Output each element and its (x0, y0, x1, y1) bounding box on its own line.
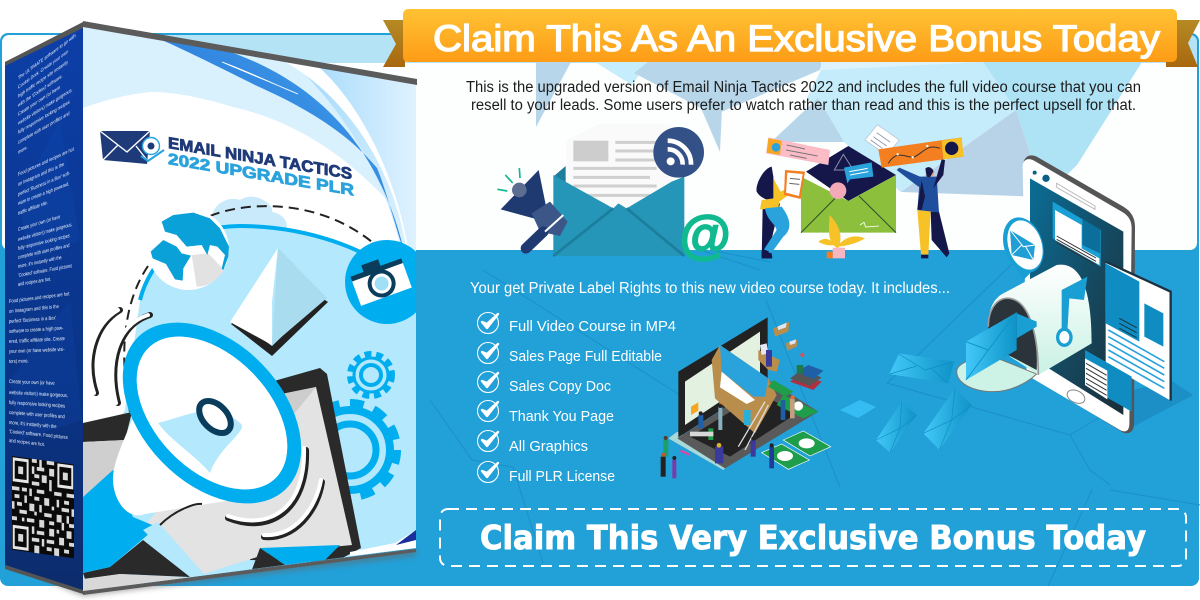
item: sales page (478, 342, 662, 365)
mail badge (996, 212, 1050, 280)
side panel text: ered, traffic affiliate site. Create (9, 336, 65, 344)
money bills (762, 380, 831, 469)
logo title: 2022 UPGRADE PLR (168, 150, 354, 200)
side panel text: Create your own (or have (9, 379, 55, 386)
side panel text: Create your own (or have (18, 213, 61, 232)
pale polygon backdrop (160, 35, 1197, 197)
side panel text: more. (18, 144, 28, 156)
side panel text: website visitors) make gorgeous, (18, 87, 72, 127)
rss badge (653, 127, 704, 178)
intro paragraph: resell to your leads. Some users prefer to watch rather than read and this is the perfect upsell for that. (471, 97, 1136, 114)
side panel text: software to create a high pow- (9, 325, 64, 334)
side panel text: high traffic recipe site instantly (18, 59, 68, 100)
side panel text: Food pictures and recipes are hot (18, 146, 74, 177)
ground shadow (1133, 380, 1193, 427)
parachute boxes (773, 322, 797, 351)
side panel text: on Instagram and this is the (9, 303, 59, 314)
side panel text: complete with user profiles and (18, 110, 70, 146)
orange chart (878, 137, 963, 168)
books (790, 353, 823, 390)
illustration light blue field (83, 226, 416, 600)
woman figure (756, 167, 805, 258)
subheading: Your get Private Label Rights to this new video course today. It includes... (470, 280, 950, 297)
item: thank you page: Thank You Page (509, 408, 614, 425)
side panel text: and recipes are hot. (18, 276, 51, 287)
man figure (897, 159, 949, 258)
box side panel (5, 22, 83, 594)
megaphone (83, 322, 302, 577)
teal envelope (553, 166, 684, 256)
call to action: Claim This Very Exclusive Bonus Today (480, 518, 1146, 557)
side panel text: tors) more. (9, 358, 29, 364)
letter (567, 123, 672, 207)
QR code (12, 456, 74, 558)
pale right bands (294, 64, 416, 252)
side panel text: website visitors) make gorgeous, (18, 221, 72, 242)
item: sales page: Sales Page Full Editable (509, 348, 662, 365)
plant (818, 215, 865, 258)
item: sales copy: Sales Copy Doc (509, 378, 611, 395)
blue chat bubble (844, 162, 873, 183)
screen card (1053, 202, 1101, 267)
side panel text (9, 32, 76, 447)
laptop (83, 368, 361, 600)
side panel text: with the 'Cooked' software. (18, 73, 62, 109)
green envelope (801, 146, 896, 233)
product box (5, 21, 429, 600)
cloud (212, 196, 287, 228)
side panel text: website visitors) make gorgeous, (9, 390, 68, 398)
call to action (440, 509, 1186, 566)
side panel text: ware to create a high powered, (18, 181, 69, 206)
side panel text: fully responsive looking recipes (18, 99, 70, 136)
side panel text: complete with user profiles and (18, 242, 70, 260)
flying envelopes (840, 353, 972, 453)
document panel (1106, 262, 1171, 401)
item: license (478, 462, 615, 485)
envelope two (876, 402, 917, 453)
intro paragraph: This is the upgraded version of Email Ninja Tactics 2022 and includes the full video course that you can (466, 79, 1141, 96)
sound waves (90, 310, 322, 537)
laptop platform (668, 380, 818, 470)
logo title (168, 134, 354, 200)
phone (1023, 155, 1135, 433)
side panel text: traffic affiliate site. (18, 199, 48, 216)
laptop screen (678, 317, 768, 437)
item: license: Full PLR License (509, 468, 615, 485)
white strip above swoosh (286, 62, 408, 246)
side panel text: fully responsive looking recipes (18, 232, 70, 251)
ribbon banner (383, 9, 1200, 67)
envelope icon (230, 248, 328, 356)
side panel text: perfect 'Business in a Box' (9, 315, 56, 324)
large gear (332, 399, 401, 500)
megaphone (497, 168, 568, 248)
side panel text: and recipes are hot. (9, 438, 45, 447)
illustration: phone and mailbox (957, 155, 1193, 433)
item: graphics (478, 430, 588, 455)
box shadow (40, 548, 416, 596)
facet lines on lower panel (430, 250, 1200, 586)
side panel text: your own (or have website visi- (9, 346, 65, 354)
side panel text: 'Cooked' software. Food pictures (18, 263, 73, 278)
at sign: @ (679, 206, 731, 265)
side panel text: Cookie Dork. Create your own (18, 48, 68, 91)
logo title: EMAIL NINJA TACTICS (168, 134, 352, 183)
side panel text: 'Cooked' software. Food pictures (9, 429, 68, 440)
side panel text: on Instagram and this is the (18, 161, 64, 187)
camera icon (345, 240, 416, 324)
pink card (766, 137, 830, 165)
small people (661, 350, 795, 478)
item: sales copy (478, 372, 611, 395)
side panel text: fully responsive looking recipes (9, 400, 66, 409)
side panel text: more, it's instantly with the (18, 254, 62, 269)
paper (865, 125, 899, 155)
item: video course: Full Video Course in MP4 (509, 318, 676, 335)
item: graphics: All Graphics (509, 438, 588, 455)
main title: Claim This As An Exclusive Bonus Today (433, 18, 1161, 59)
item: video course (478, 312, 676, 335)
bottom card (1085, 350, 1132, 412)
item: thank you page (478, 400, 614, 425)
illustration: team with envelope (756, 125, 963, 258)
blue swoosh (163, 40, 402, 243)
envelope four (840, 400, 876, 418)
box front face (83, 24, 429, 600)
front top pale area (83, 24, 387, 200)
side panel text: Create your own (or have (18, 84, 60, 118)
envelope one (889, 353, 954, 383)
upper white panel (2, 35, 1197, 250)
side panel text: complete with user profiles and (9, 410, 65, 419)
small gear (351, 355, 391, 395)
mailbox (957, 265, 1092, 392)
side panel text: The ULTIMATE software to go with (18, 32, 76, 82)
box edges (83, 21, 417, 595)
globe icon (148, 209, 229, 290)
intro paragraph (466, 79, 1141, 114)
side panel text: perfect 'Business in a Box' soft- (18, 170, 70, 197)
logo envelope icon (100, 131, 164, 164)
ladder (738, 402, 768, 450)
illustration: email and megaphone (497, 123, 731, 265)
side panel text: Food pictures and recipes are hot (9, 291, 70, 304)
dashed orbit (124, 206, 372, 412)
illustration: isometric laptop and people (661, 317, 831, 478)
envelope three (923, 388, 972, 450)
side panel text: more, it's instantly with the (9, 420, 57, 429)
open brown envelope (712, 343, 780, 433)
ribbon tails (383, 20, 1200, 67)
checklist (478, 312, 676, 485)
